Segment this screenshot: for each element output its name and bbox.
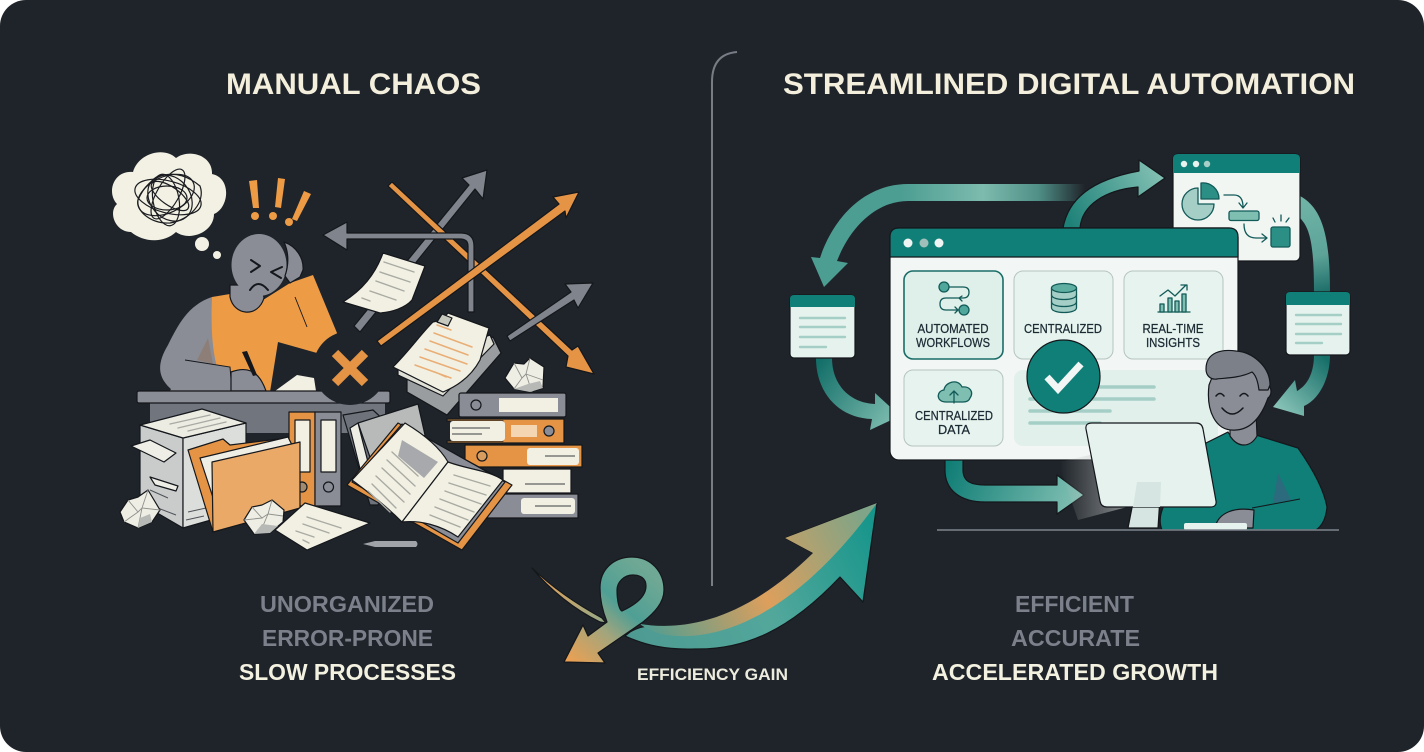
face	[250, 260, 282, 290]
arrow: top arc to left	[811, 184, 1085, 287]
chart window	[1173, 154, 1300, 261]
card: real-time insights: INSIGHTS	[1146, 336, 1200, 350]
hand on head	[284, 242, 303, 283]
gray arrow: diagonal up	[354, 170, 487, 332]
arrow: dashboard to monitor	[945, 446, 1084, 514]
shaded seam	[197, 338, 213, 364]
card: centralized	[1014, 271, 1113, 359]
desk	[137, 375, 390, 433]
illustration: digital automation	[790, 154, 1350, 530]
neck and head	[230, 234, 286, 312]
gray sleeve and shoulder	[160, 297, 235, 392]
hair	[1206, 350, 1270, 390]
card: real-time insights: REAL-TIME	[1142, 322, 1204, 336]
file box stack	[131, 409, 246, 528]
text block: automation outcomes: ACCURATE	[1011, 625, 1140, 651]
text block: manual chaos outcomes: SLOW PROCESSES	[239, 659, 456, 685]
text block: manual chaos outcomes	[239, 591, 456, 685]
orange sweater	[212, 275, 337, 392]
neck	[1230, 412, 1257, 445]
pie chart icon	[1182, 183, 1219, 220]
sleeve shadow	[1273, 473, 1291, 503]
text block: manual chaos outcomes: UNORGANIZED	[260, 591, 434, 617]
rising band	[625, 503, 877, 649]
text block: manual chaos outcomes: ERROR-PRONE	[262, 625, 433, 651]
text block: automation outcomes: EFFICIENT	[1015, 591, 1134, 617]
card: automated workflows: AUTOMATED	[918, 322, 988, 336]
desk line	[937, 529, 1339, 531]
divider	[712, 52, 737, 586]
small window: right	[1286, 292, 1350, 355]
card: automated workflows: WORKFLOWS	[916, 336, 990, 350]
crumpled ball: on books	[505, 358, 544, 392]
title: manual chaos: MANUAL CHAOS	[226, 68, 481, 101]
card: centralized: CENTRALIZED	[1024, 322, 1102, 336]
card: centralized data: CENTRALIZED	[915, 409, 993, 423]
arrow: right side into person	[1273, 355, 1330, 416]
left forearm	[170, 360, 233, 391]
sleeve line	[1252, 499, 1300, 508]
exclamation marks	[249, 178, 311, 226]
book stack	[447, 393, 582, 518]
card: centralized data	[904, 370, 1003, 446]
arrow: up to chart window	[1063, 160, 1165, 228]
text block: automation outcomes	[932, 591, 1218, 685]
gray arrow: bent left	[323, 222, 474, 312]
card: real-time insights	[1124, 271, 1223, 359]
flying paper	[343, 253, 425, 313]
face	[1208, 370, 1271, 430]
arm crease	[295, 297, 307, 327]
status panel	[1014, 370, 1218, 446]
thought bubble with scribble	[112, 152, 226, 259]
crumpled ball: centre	[244, 500, 284, 534]
paper on floor	[275, 503, 370, 550]
monitor stand	[1128, 482, 1161, 528]
error x badge	[313, 331, 387, 405]
title: streamlined digital automation: STREAMLINED DIGITAL AUTOMATION	[783, 68, 1355, 101]
gray arrow: right	[507, 283, 593, 341]
efficiency gain arrow	[532, 503, 877, 663]
pen on floor	[363, 541, 418, 547]
small window: left	[790, 295, 855, 358]
person at computer	[1086, 350, 1327, 530]
check badge	[1027, 340, 1100, 413]
person	[160, 234, 337, 392]
writing hand and pen	[231, 351, 266, 391]
hand	[1215, 509, 1254, 528]
orange arrow: crossing down	[388, 182, 594, 374]
illustration: manual chaos	[112, 152, 594, 550]
monitor	[1086, 423, 1216, 507]
text block: automation outcomes: ACCELERATED GROWTH	[932, 659, 1218, 685]
crumpled ball: left	[120, 490, 160, 528]
open book	[347, 423, 512, 550]
teal torso	[1160, 432, 1327, 530]
label: efficiency gain: EFFICIENCY GAIN	[637, 665, 788, 684]
smile	[1216, 394, 1248, 414]
process flow icon	[1224, 195, 1290, 247]
thin tail	[532, 568, 606, 623]
keyboard	[1184, 523, 1247, 530]
arrow: right side down	[1300, 196, 1330, 292]
orange arrow: crossing up	[377, 192, 579, 346]
card: centralized data: DATA	[938, 423, 971, 437]
loop	[564, 557, 664, 663]
sheets behind book	[343, 404, 425, 505]
arrow: left side into dashboard	[816, 358, 900, 430]
main dashboard window	[890, 228, 1238, 460]
binders	[289, 412, 341, 506]
paper stack with orange lines	[393, 313, 501, 415]
card: automated workflows	[904, 271, 1003, 359]
orange folder	[188, 437, 300, 532]
monitor glow	[1058, 455, 1135, 520]
